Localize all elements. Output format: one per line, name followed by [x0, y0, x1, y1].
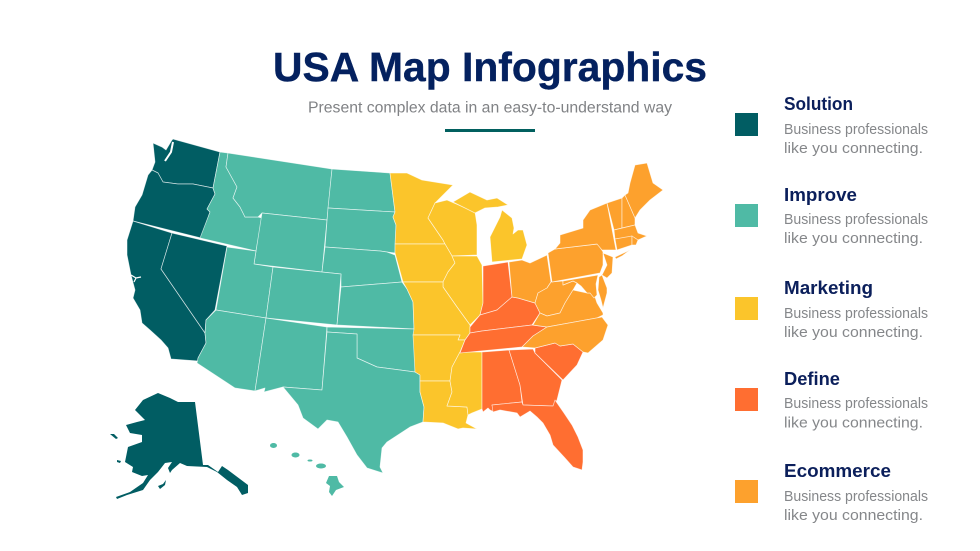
icon: Puget Sound and bay cutouts [131, 142, 173, 282]
region: Marketing states [390, 173, 527, 429]
USA map [110, 139, 663, 499]
legend item: Marketing [735, 278, 928, 341]
legend item: Improve: Improve [784, 185, 857, 205]
region: Improve states [197, 152, 424, 496]
region: Ecommerce states [509, 163, 663, 353]
legend item: Marketing: Business professionals [784, 305, 928, 322]
region: Define states [460, 262, 583, 470]
legend item: Solution: Business professionals [784, 121, 928, 138]
legend [735, 94, 928, 524]
legend item: Define: Business professionals [784, 395, 928, 412]
legend item: Define: like you connecting. [784, 414, 923, 432]
region: Solution states [110, 139, 248, 499]
legend item: Solution: like you connecting. [784, 140, 923, 157]
legend item: Improve [735, 185, 928, 247]
legend item: Marketing: Marketing [784, 278, 873, 298]
legend item: Improve: Business professionals [784, 211, 928, 228]
title: USA Map Infographics [273, 44, 707, 90]
legend item: Improve: like you connecting. [784, 230, 923, 247]
subtitle: Present complex data in an easy-to-understand way [308, 100, 672, 116]
legend item: Ecommerce: Ecommerce [784, 461, 891, 481]
legend item: Solution [735, 94, 928, 157]
legend item: Marketing: like you connecting. [784, 324, 923, 341]
legend item: Ecommerce: like you connecting. [784, 507, 923, 524]
legend item: Ecommerce [735, 461, 928, 524]
title underline [445, 129, 535, 132]
legend item: Define [735, 369, 928, 432]
legend item: Define: Define [784, 369, 840, 389]
legend item: Solution: Solution [784, 94, 853, 114]
legend item: Ecommerce: Business professionals [784, 488, 928, 505]
